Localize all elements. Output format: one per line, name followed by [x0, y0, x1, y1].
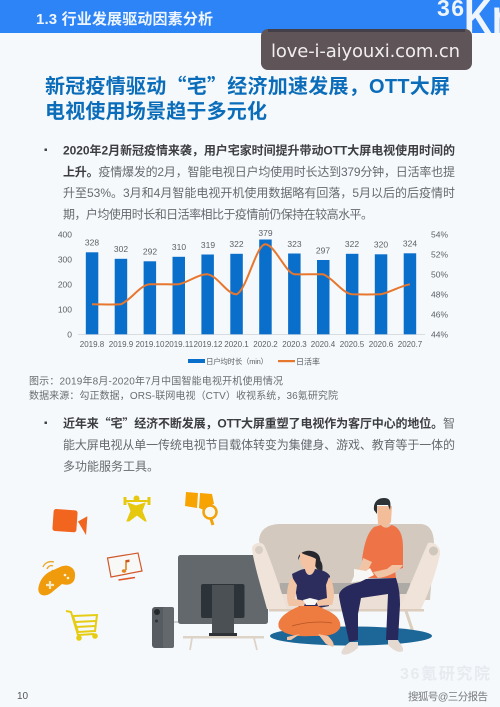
chart caption and source: 图示：2019年8月-2020年7月中国智能电视开机使用情况: [29, 374, 283, 388]
text block: first bullet: 升至53%。3月和4月智能电视开机使用数据略有回落，5月以后的后疫情时: [63, 185, 455, 200]
text block: first bullet: [44, 142, 455, 222]
right axis labels: 48%: [431, 290, 448, 300]
x axis labels: 2019.10: [136, 340, 165, 349]
illustration: speaker: [152, 607, 174, 648]
text block: second bullet: 能大屏电视从单一传统电视节目载体转变为集健身、游戏、教育等于一体的: [63, 437, 455, 452]
left axis labels: [58, 230, 72, 340]
illustration: woman playing games: [278, 551, 340, 647]
x axis labels: 2019.8: [80, 340, 105, 349]
text block: first bullet: 期，户均使用时长和日活率相比于疫情前仍保持在较高水平。: [63, 206, 373, 222]
page number: 10: [17, 691, 29, 702]
bar value labels: 324: [403, 238, 417, 248]
left axis labels: 300: [58, 254, 72, 264]
bar value labels: 292: [143, 246, 157, 256]
bar value labels: 322: [229, 239, 244, 249]
chart caption and source: [29, 374, 338, 402]
right axis labels: 44%: [431, 330, 448, 340]
bar value labels: 302: [114, 244, 128, 254]
left axis labels: 100: [58, 304, 72, 314]
header bar: [0, 0, 500, 33]
tv stand table: [183, 636, 264, 650]
right axis labels: 54%: [431, 230, 448, 240]
watermark label: love-i-aiyouxi.com.cn: [271, 41, 460, 62]
bar value labels: 297: [316, 245, 330, 255]
illustration: man playing games: [339, 498, 403, 655]
x axis labels: 2019.11: [165, 340, 194, 349]
x axis labels: 2019.12: [194, 340, 223, 349]
icon: video camera: [52, 509, 88, 535]
x axis labels: 2020.3: [282, 340, 307, 349]
icon: weight lifter: [124, 496, 150, 521]
bar value labels: 323: [287, 239, 302, 249]
faint watermark: 36氪研究院: 36氪研究院: [400, 664, 490, 683]
text block: first bullet: 上升。疫情爆发的2月，智能电视日户均使用时长达到379分钟，日活率也提: [63, 164, 455, 179]
x axis labels: 2020.5: [340, 340, 365, 349]
bar value labels: 322: [345, 239, 359, 249]
illustration: rug: [270, 626, 432, 646]
watermark label: [261, 29, 472, 70]
text block: second bullet: 近年来“宅”经济不断发展，OTT大屏重塑了电视作为客厅中心的地位。智: [63, 414, 455, 432]
text block: second bullet: 多功能服务工具。: [63, 458, 159, 474]
title: 新冠疫情驱动“宅”经济加速发展，OTT大屏: [45, 70, 450, 99]
section heading: 1.3 行业发展驱动因素分析: [36, 10, 213, 28]
text block: second bullet: [44, 414, 455, 474]
activity rate line: [92, 244, 410, 305]
bar value labels: [85, 228, 417, 256]
right axis labels: [431, 230, 448, 340]
combo chart: daily usage bars and activity rate line: [58, 228, 448, 366]
icon: book with magnifier: [185, 492, 216, 525]
left axis labels: 200: [58, 280, 72, 290]
left axis labels: 400: [58, 230, 72, 240]
source watermark: 搜狐号@三分报告: [408, 690, 488, 703]
bars: [86, 240, 416, 334]
right axis labels: 52%: [431, 250, 448, 260]
x axis labels: 2019.9: [109, 340, 134, 349]
left axis labels: 0: [67, 330, 72, 340]
x axis labels: 2020.1: [224, 340, 249, 349]
legend: 日活率: [296, 356, 320, 366]
x axis labels: [80, 340, 423, 349]
x axis labels: 2020.2: [253, 340, 278, 349]
x axis labels: 2020.4: [311, 340, 336, 349]
legend: 日户均时长（min）: [206, 356, 268, 366]
icon: game controller: [38, 562, 75, 595]
icon: music on screen: [108, 553, 142, 580]
logo: 36Kr: [437, 0, 500, 44]
x axis labels: 2020.7: [398, 340, 423, 349]
illustration: sofa: [252, 524, 440, 632]
x axis labels: 2020.6: [369, 340, 394, 349]
legend: [188, 356, 320, 366]
bar value labels: 310: [172, 242, 186, 252]
bar value labels: 328: [85, 238, 99, 248]
text block: first bullet: 2020年2月新冠疫情来袭，用户宅家时间提升带动OTT大屏电视使用时间的: [63, 142, 455, 158]
icon: shopping cart: [66, 611, 97, 640]
title: 电视使用场景趋于多元化: [45, 100, 267, 123]
title: [45, 70, 450, 123]
right axis labels: 46%: [431, 310, 448, 320]
bar value labels: 319: [201, 240, 215, 250]
illustration: television back: [174, 555, 268, 650]
bar value labels: 379: [258, 228, 273, 238]
chart caption and source: 数据来源：勾正数据，ORS-联网电视（CTV）收视系统，36氪研究院: [29, 389, 338, 402]
right axis labels: 50%: [431, 270, 448, 280]
bar value labels: 320: [374, 240, 388, 250]
